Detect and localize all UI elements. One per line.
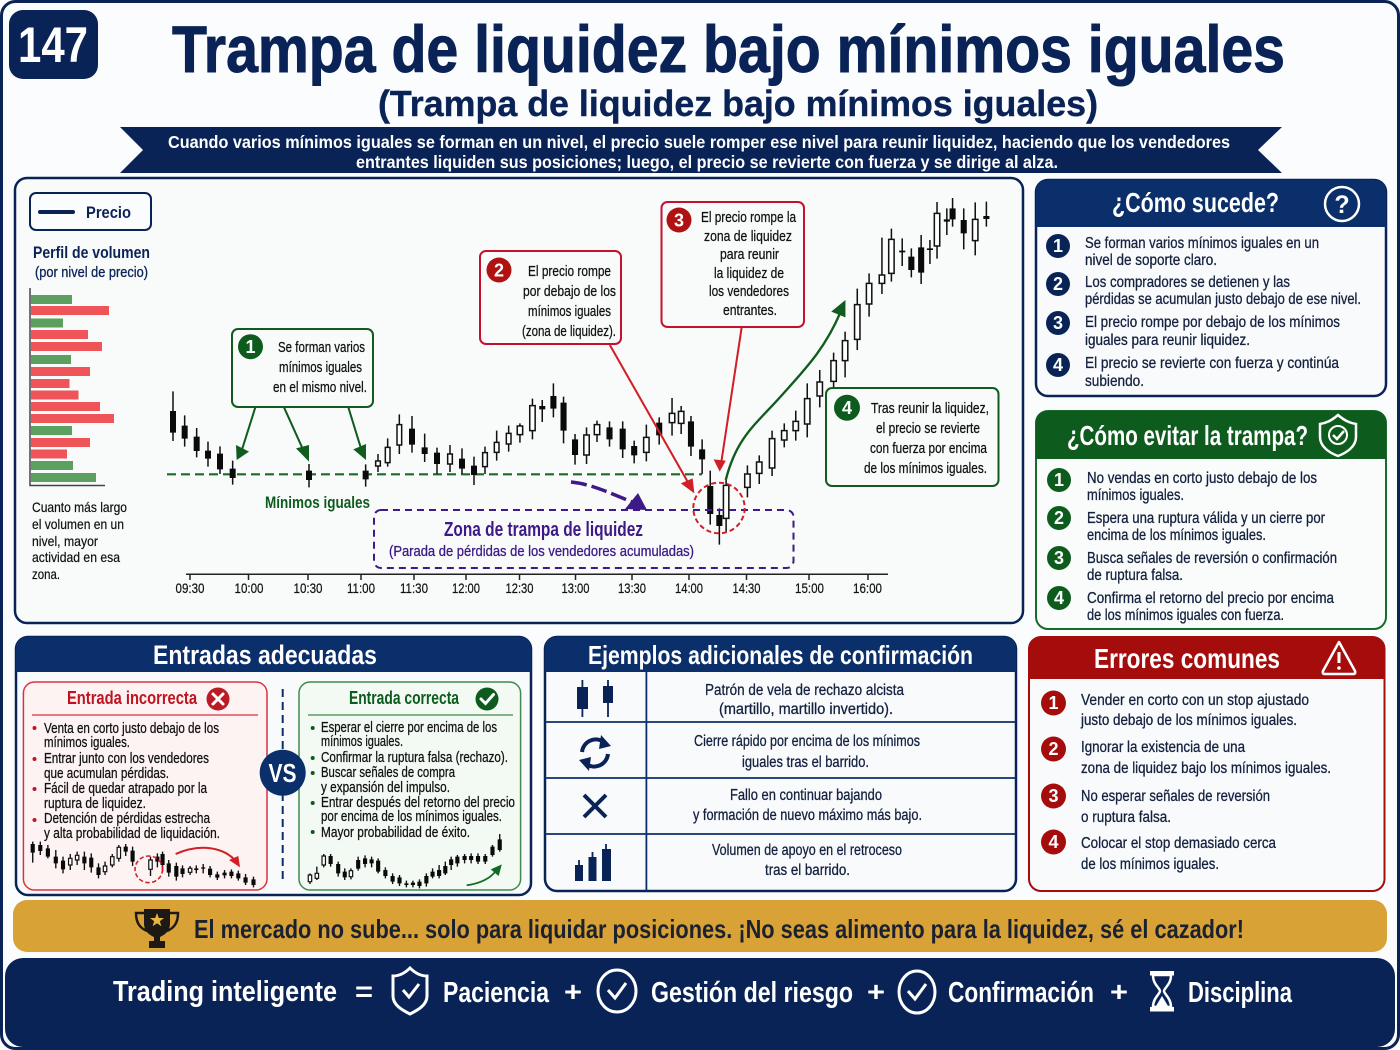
callout 3: 3 [674, 210, 684, 230]
callout 2: por debajo de los [523, 283, 616, 300]
steps list: 3 [1053, 313, 1063, 333]
chart: time axis: 15:00 [795, 580, 824, 596]
callout 2: (zona de liquidez). [522, 323, 616, 340]
card: wrong entry: Detención de pérdidas estrecha [44, 811, 211, 827]
icon: trophy [136, 909, 178, 948]
icon: question mark [1325, 187, 1359, 221]
card: correct entry: y expansión del impulso. [321, 780, 450, 796]
callout 3: la liquidez de [714, 265, 784, 282]
divider: versus: VS [268, 758, 296, 788]
callout 1: mínimos iguales [279, 359, 362, 376]
chart: time axis [176, 574, 888, 596]
mistakes list: No esperar señales de reversión [1081, 788, 1270, 805]
steps list: El precio rompe por debajo de los mínimos [1085, 314, 1340, 331]
row: supporting volume: tras el barrido. [765, 862, 850, 879]
callout 3: los vendedores [709, 283, 789, 300]
banner: smart trading formula: Gestión del riesgo [651, 977, 853, 1009]
icon: shield [393, 968, 427, 1014]
tips list: 2 [1054, 508, 1064, 528]
icon: hourglass [1150, 971, 1174, 1012]
card: wrong entry: Entrar junto con los vendedores [44, 751, 209, 767]
card: wrong entry: y alta probabilidad de liquidación. [44, 826, 220, 842]
arrows: red to breakdown [610, 327, 742, 493]
banner: smart trading formula: + [564, 976, 582, 1007]
tips list: 4 [1054, 588, 1064, 608]
row: failure to continue: y formación de nuevo máximo más bajo. [693, 807, 922, 824]
card: wrong entry: Entrada incorrecta [67, 688, 198, 708]
tips list: Busca señales de reversión o confirmación [1087, 550, 1337, 567]
icon: check circle [899, 971, 935, 1013]
card: wrong entry: Venta en corto justo debajo de los [44, 721, 219, 737]
card: correct entry: por encima de los mínimos iguales. [321, 809, 502, 825]
heading: ¿Cómo sucede? [1112, 187, 1279, 218]
chart: volume profile bars [30, 288, 114, 486]
callout 4 [826, 388, 998, 486]
note: volume explanation: Cuanto más largo [32, 499, 127, 515]
tips list: encima de los mínimos iguales. [1087, 527, 1266, 544]
mistakes list: zona de liquidez bajo los mínimos iguales. [1081, 760, 1331, 777]
panel: how it happens [1036, 180, 1386, 396]
heading: Errores comunes [1094, 643, 1280, 674]
card: correct entry: mínimos iguales. [321, 734, 403, 750]
callout 3 [662, 202, 804, 327]
tips list: Espera una ruptura válida y un cierre por [1087, 510, 1326, 527]
callout 1: Se forman varios [278, 339, 365, 356]
mistakes list: 3 [1048, 786, 1059, 806]
zone: liquidity trap: Zona de trampa de liquidez [444, 519, 643, 541]
heading: Entradas adecuadas [153, 640, 377, 670]
row: supporting volume [575, 842, 902, 881]
banner: smart trading formula: Trading inteligente [113, 976, 337, 1008]
chart: mini bearish candles [31, 842, 256, 887]
tips list: de los mínimos iguales con fuerza. [1087, 607, 1284, 624]
mistakes list: 4 [1048, 832, 1059, 852]
chart: time axis: 14:00 [675, 580, 703, 596]
row: failure to continue [584, 787, 922, 824]
tips list: de ruptura falsa. [1087, 567, 1183, 584]
heading: ¿Cómo evitar la trampa? [1067, 420, 1308, 451]
banner: smart trading formula: Confirmación [948, 977, 1094, 1009]
chart: time axis: 13:30 [618, 580, 646, 596]
card: wrong entry: que acumulan pérdidas. [44, 766, 169, 782]
subtitle: (Trampa de liquidez bajo mínimos iguales) [378, 83, 1098, 124]
tips list: 1 [1054, 470, 1064, 490]
line: equal lows level [167, 473, 702, 475]
chart: time axis: 10:30 [294, 580, 323, 596]
callout 4: 4 [842, 398, 852, 418]
chart: candlesticks left part [170, 391, 511, 487]
callout 3: para reunir [720, 246, 779, 263]
chart: time axis: 13:00 [562, 580, 590, 596]
steps list: 2 [1053, 274, 1063, 294]
chart: time axis: 12:30 [506, 580, 534, 596]
row: rejection candle: Patrón de vela de rechazo alcista [705, 682, 904, 699]
mistakes list: Colocar el stop demasiado cerca [1081, 835, 1276, 852]
banner: summary ribbon [120, 127, 1282, 173]
mistakes list [1041, 690, 1331, 873]
chart: time axis: 09:30 [176, 580, 205, 596]
note: volume explanation [32, 499, 127, 582]
row: rejection candle [577, 680, 904, 718]
callout 4: de los mínimos iguales. [864, 460, 987, 477]
callout 4: Tras reunir la liquidez, [871, 400, 989, 417]
heading: Ejemplos adicionales de confirmación [588, 640, 973, 670]
tips list: No vendas en corto justo debajo de los [1087, 470, 1317, 487]
steps list [1046, 234, 1361, 390]
mistakes list: justo debajo de los mínimos iguales. [1080, 712, 1297, 729]
card: wrong entry: Fácil de quedar atrapado por la [44, 781, 208, 797]
note: volume explanation: nivel, mayor [32, 533, 98, 549]
chart: time axis: 11:00 [347, 580, 375, 596]
label: equal lows: Mínimos iguales [265, 494, 370, 512]
card: wrong entry: ruptura de liquidez. [44, 796, 146, 812]
banner: smart trading formula: + [867, 976, 885, 1007]
steps list: 4 [1053, 355, 1063, 375]
mistakes list: 2 [1048, 739, 1059, 759]
mistakes list: Ignorar la existencia de una [1081, 739, 1245, 756]
badge: number 147: 147 [18, 17, 88, 73]
callout 4: el precio se revierte [876, 420, 980, 437]
tips list [1047, 468, 1337, 624]
panel: suitable entries [16, 637, 531, 895]
icon: question mark: ? [1334, 191, 1350, 219]
callout 2: mínimos iguales [528, 303, 611, 320]
banner: smart trading formula: Paciencia [443, 977, 550, 1009]
chart: time axis: 10:00 [234, 580, 264, 596]
panel: how to avoid the trap [1036, 411, 1386, 629]
banner: smart trading formula [5, 958, 1395, 1047]
chart: time axis: 11:30 [400, 580, 428, 596]
card: correct entry: Buscar señales de compra [321, 765, 456, 781]
heading: volume profile [33, 244, 150, 281]
banner: smart trading formula: = [355, 976, 373, 1007]
arrow: green reversal curve [726, 300, 845, 480]
chart: time axis: 16:00 [853, 580, 882, 596]
callout 1 [232, 329, 373, 407]
arrow: purple dashed to zone [571, 482, 647, 510]
callout 3: El precio rompe la [701, 209, 797, 226]
banner: smart trading formula: Disciplina [1188, 977, 1293, 1009]
heading: volume profile: Perfil de volumen [33, 244, 150, 262]
steps list: subiendo. [1085, 373, 1144, 390]
chart: mini bullish candles [308, 834, 502, 888]
steps list: Los compradores se detienen y las [1085, 274, 1290, 291]
tips list: 3 [1054, 548, 1064, 568]
legend: price: Precio [86, 204, 131, 222]
card: correct entry: Confirmar la ruptura falsa (rechazo). [321, 750, 508, 766]
banner: smart trading formula: + [1110, 976, 1128, 1007]
card: correct entry [299, 682, 521, 890]
icon: shield check [1320, 415, 1356, 456]
note: volume explanation: zona. [32, 566, 60, 582]
steps list: El precio se revierte con fuerza y continúa [1085, 355, 1339, 372]
heading: volume profile: (por nivel de precio) [35, 265, 148, 281]
mistakes list: de los mínimos iguales. [1081, 856, 1219, 873]
panel: additional confirmation examples [545, 637, 1016, 891]
icon: check circle [598, 970, 636, 1012]
card: correct entry: Mayor probabilidad de éxito. [321, 825, 470, 841]
arrows: from callout 1 to equal lows [236, 407, 366, 462]
callout 2: 2 [494, 260, 504, 280]
note: volume explanation: el volumen en un [32, 516, 124, 532]
mistakes list: o ruptura falsa. [1081, 809, 1171, 826]
banner: gold takeaway [13, 900, 1387, 952]
chart: time axis: 12:00 [452, 580, 480, 596]
card: correct entry: Entrar después del retorno del precio [321, 795, 515, 811]
steps list: 1 [1053, 236, 1063, 256]
legend: price [30, 193, 151, 230]
callout 2 [480, 251, 621, 344]
chart: candlesticks right part [517, 198, 989, 545]
callout 3: entrantes. [723, 302, 777, 319]
panel: main price chart [15, 178, 1023, 623]
callout 4: con fuerza por encima [870, 440, 988, 457]
tips list: mínimos iguales. [1087, 487, 1184, 504]
banner: summary ribbon: Cuando varios mínimos iguales se forman en un nivel, el precio suele romper ese nivel para reunir liquidez, haciendo que los vendedores [168, 132, 1230, 152]
row: supporting volume: Volumen de apoyo en el retroceso [712, 842, 902, 859]
card: correct entry: Esperar el cierre por encima de los [321, 720, 497, 736]
row: fast close above: iguales tras el barrido. [742, 754, 869, 771]
card: wrong entry [23, 682, 267, 890]
zone: liquidity trap [374, 510, 794, 568]
icon: warning [1323, 642, 1355, 674]
callout 3: zona de liquidez [704, 228, 792, 245]
banner: summary ribbon: entrantes liquiden sus posiciones; luego, el precio se revierte con fuerza y se dirige al alza. [356, 152, 1058, 172]
marker: liquidity sweep circle [693, 483, 745, 533]
mistakes list: 1 [1048, 693, 1059, 713]
row: fast close above [579, 733, 920, 771]
zone: liquidity trap: (Parada de pérdidas de los vendedores acumuladas) [389, 543, 694, 560]
note: volume explanation: actividad en esa [32, 549, 120, 565]
divider: versus [260, 689, 306, 880]
steps list: iguales para reunir liquidez. [1085, 332, 1250, 349]
callout 1: en el mismo nivel. [273, 379, 367, 396]
chart: time axis: 14:30 [732, 580, 761, 596]
tips list: Confirma el retorno del precio por encima [1087, 590, 1334, 607]
row: rejection candle: (martillo, martillo invertido). [719, 701, 893, 718]
mistakes list: Vender en corto con un stop ajustado [1081, 692, 1309, 709]
card: correct entry: Entrada correcta [349, 688, 460, 708]
callout 2: El precio rompe [528, 263, 611, 280]
steps list: Se forman varios mínimos iguales en un [1085, 235, 1319, 252]
callout 1: 1 [245, 337, 256, 357]
card: wrong entry: mínimos iguales. [44, 735, 130, 751]
row: failure to continue: Fallo en continuar bajando [730, 787, 882, 804]
panel: common mistakes [1029, 637, 1384, 891]
steps list: nivel de soporte claro. [1085, 252, 1217, 269]
row: fast close above: Cierre rápido por encima de los mínimos [694, 733, 920, 750]
